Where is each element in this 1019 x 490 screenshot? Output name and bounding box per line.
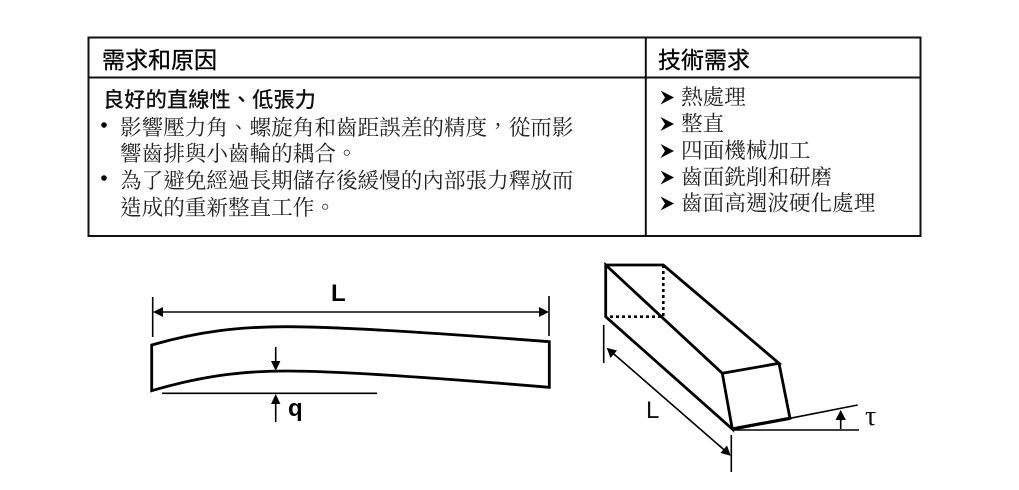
diagram: straightness deviation of bar [152,280,549,422]
hidden edges [606,265,663,317]
item: heat treatment: 熱處理 [681,86,746,110]
twist angle [732,401,876,432]
length dimension [604,325,731,472]
heading: needs and reasons: 需求和原因 [102,47,217,73]
length dimension [153,280,549,337]
deviation q dimension [162,347,377,422]
subheading: 良好的直線性、低張力 [103,88,316,112]
text block: technical requirements list [660,86,876,216]
item: four-face machining: 四面機械加工 [681,139,811,163]
requirements table [88,38,920,236]
item: straightening [660,112,724,136]
text block: needs and reasons [101,88,573,220]
heading: technical requirements: 技術需求 [658,47,750,73]
twist angle: τ [865,401,876,432]
bullet 2 [101,169,573,220]
item: tooth milling and grinding: 齒面銑削和研磨 [681,166,832,190]
item: straightening: 整直 [681,112,724,136]
bullet 2: 為了避免經過長期儲存後緩慢的內部張力釋放而 [120,169,573,193]
bullet 1 [101,116,573,166]
deviation q dimension: q [288,395,303,422]
table grid [88,38,920,236]
bullet 1: 響齒排與小齒輪的耦合。 [120,142,358,166]
bent bar [152,327,549,391]
length dimension: L [646,397,659,424]
bullet 1: 影響壓力角、螺旋角和齒距誤差的精度，從而影 [120,116,573,140]
bar outline [606,265,790,429]
diagram: twist of bar [604,265,876,472]
length dimension: L [331,280,346,307]
bullet 2: 造成的重新整直工作。 [120,196,336,220]
item: induction hardening: 齒面高週波硬化處理 [681,192,876,216]
